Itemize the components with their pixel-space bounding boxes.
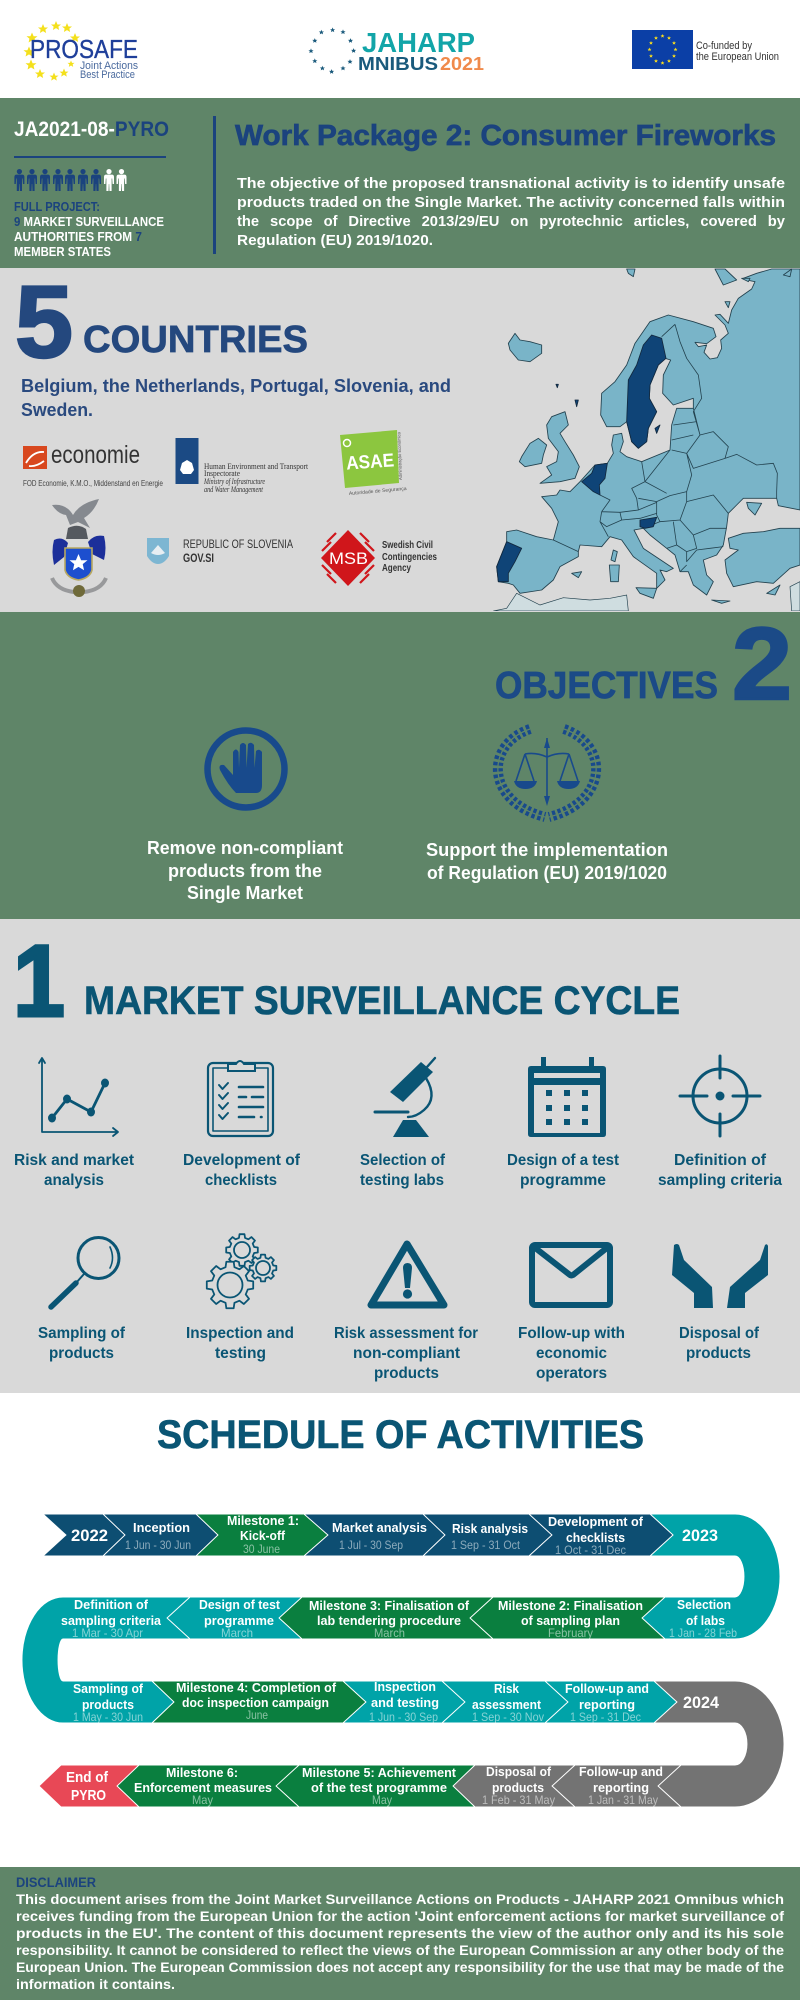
label: risk assessment for non-compliant products: products — [374, 1365, 439, 1382]
step: inspection and testing: 1 Jun - 30 Sep — [369, 1710, 438, 1724]
logo: Human Environment and Transport Inspectorate: and Water Management — [204, 485, 264, 494]
icon: open hands — [672, 1244, 768, 1308]
label: disposal of products — [679, 1325, 760, 1362]
step: selection of labs: of labs — [686, 1613, 725, 1628]
icon: nine people — [14, 169, 126, 191]
logo: PROSAFE: PROSAFE — [30, 34, 138, 64]
step: inception — [125, 1520, 191, 1552]
step: selection of labs: Selection — [677, 1597, 731, 1612]
step: sampling of products — [73, 1681, 144, 1724]
objective text: remove non-compliant: Single Market — [187, 883, 303, 903]
icon: calendar — [528, 1057, 606, 1137]
label: selection of testing labs: Selection of — [360, 1152, 446, 1169]
step: milestone 1: Kick-off — [240, 1528, 286, 1543]
step: sampling of products: 1 May - 30 Jun — [73, 1710, 143, 1724]
disclaimer body: receives funding from the European Union for the action 'Joint enforcement actions for market surveillance of — [16, 1909, 785, 1924]
objective paragraph: The objective of the proposed transnational activity is to identify unsafe — [237, 175, 785, 192]
step: design of test programme: Design of test — [199, 1597, 281, 1612]
step: risk assessment — [472, 1681, 544, 1724]
step: follow-up and reporting 2023: 1 Sep - 31 Dec — [570, 1710, 641, 1724]
step: milestone 4 — [176, 1680, 337, 1722]
icon: checklist clipboard — [208, 1061, 273, 1136]
objective paragraph: the scope of Directive 2013/29/EU on pyrotechnic articles, covered by — [237, 213, 786, 230]
panel: market surveillance cycle — [0, 919, 800, 1393]
step: definition of sampling criteria: 1 Mar - 30 Apr — [72, 1626, 143, 1640]
label: follow-up with economic operators — [518, 1325, 625, 1382]
countries list: Sweden. — [21, 400, 93, 420]
disclaimer body: This document arises from the Joint Market Surveillance Actions on Products - JAHARP 2021 Omnibus which — [16, 1892, 784, 1907]
step: market analysis: 1 Jul - 30 Sep — [339, 1538, 403, 1552]
label: definition of sampling criteria: Definition of — [674, 1152, 767, 1169]
label: risk assessment for non-compliant products: Risk assessment for — [334, 1325, 478, 1342]
step: milestone 4: Milestone 4: Completion of — [176, 1680, 337, 1695]
icon: warning triangle — [371, 1244, 444, 1305]
logo: EU co-funded: Co-funded by — [696, 40, 752, 52]
step: definition of sampling criteria: Definition of — [74, 1597, 149, 1612]
objective text: remove non-compliant — [147, 838, 343, 903]
step: development of checklists: checklists — [566, 1530, 625, 1545]
step: milestone 3: lab tendering procedure — [317, 1613, 461, 1628]
big number 2: 2 — [732, 607, 792, 721]
label: risk and market analysis: analysis — [44, 1172, 104, 1189]
step: definition of sampling criteria: sampling criteria — [61, 1613, 162, 1628]
project stats: 9 MARKET SURVEILLANCE — [14, 214, 164, 229]
step: milestone 4: June — [246, 1708, 268, 1722]
logo: JAHARP Omnibus 2021 — [308, 27, 484, 74]
logo: JAHARP Omnibus 2021: 2021 — [440, 54, 484, 74]
logo: Human Environment and Transport Inspectorate — [176, 438, 309, 494]
disclaimer body: products in the EU'. The content of this document represents the view of the author only and its his sole — [16, 1926, 785, 1941]
step: milestone 6 — [134, 1765, 272, 1807]
logo: Human Environment and Transport Inspectorate: Ministry of Infrastructure — [203, 477, 265, 486]
step: risk assessment: 1 Sep - 30 Nov — [472, 1710, 544, 1724]
logo: ASAE: Autoridade de Segurança — [349, 486, 407, 497]
step: milestone 6: May — [192, 1793, 213, 1807]
disclaimer body: European Union. The European Commission does not accept any responsibility for the use that may be made of the — [16, 1960, 784, 1975]
label: disposal of products: products — [686, 1345, 751, 1362]
step: milestone 4: doc inspection campaign — [182, 1695, 329, 1710]
heading: countries: COUNTRIES — [83, 319, 308, 361]
step: milestone 6: Milestone 6: — [166, 1765, 238, 1780]
objective text: support implementation — [426, 840, 668, 883]
step: sampling of products: Sampling of — [73, 1681, 144, 1696]
step: disposal of products — [482, 1764, 555, 1807]
step: selection of labs: 1 Jan - 28 Feb — [669, 1626, 737, 1640]
disclaimer body: information it contains. — [16, 1977, 175, 1992]
step: risk analysis: Risk analysis — [452, 1521, 528, 1536]
label: inspection and testing: Inspection and — [186, 1325, 294, 1342]
step: milestone 5: Milestone 5: Achievement — [302, 1765, 457, 1780]
step: follow-up and reporting 2023: reporting — [579, 1697, 635, 1712]
year 2022: 2022 — [71, 1526, 108, 1545]
step: selection of labs — [669, 1597, 737, 1640]
icon: microscope — [375, 1058, 435, 1137]
step: milestone 1: Milestone 1: — [227, 1513, 299, 1528]
icon: magnifying glass — [51, 1238, 119, 1307]
logo: Republic of Slovenia: GOV.SI — [183, 551, 214, 565]
step: follow-up and reporting 2023 — [565, 1681, 649, 1724]
logo: MSB: Contingencies — [382, 551, 437, 563]
step: follow-up and reporting 2024 — [579, 1764, 663, 1807]
step: milestone 6: Enforcement measures — [134, 1780, 272, 1795]
step: market analysis: Market analysis — [332, 1520, 427, 1535]
step: design of test programme: March — [221, 1626, 253, 1640]
objective text: remove non-compliant: Remove non-compliant — [147, 838, 343, 858]
project code: JA2021-08-PYRO — [14, 118, 169, 141]
year 2023: 2023 — [682, 1526, 718, 1545]
logo: economie — [23, 441, 163, 488]
heading: schedule of activities: SCHEDULE OF ACTIVITIES — [157, 1413, 644, 1457]
label: selection of testing labs — [360, 1152, 446, 1189]
header logos band — [24, 21, 779, 81]
logo: Republic of Slovenia — [147, 537, 293, 565]
step: follow-up and reporting 2024: reporting — [593, 1780, 649, 1795]
label: development of checklists: checklists — [205, 1172, 277, 1189]
logo: Republic of Slovenia: REPUBLIC OF SLOVENIA — [183, 537, 293, 551]
icon: stop hand — [208, 730, 284, 808]
heading: objectives: OBJECTIVES — [495, 665, 718, 707]
logo: MSB: Agency — [382, 562, 411, 574]
label: inspection and testing: testing — [215, 1345, 266, 1362]
logo: JAHARP Omnibus 2021: JAHARP — [362, 27, 475, 58]
icon: target — [680, 1056, 760, 1136]
project stats — [14, 199, 164, 259]
objective paragraph: products traded on the Single Market. The activity concerned falls within — [237, 194, 785, 211]
panel: disclaimer — [0, 1867, 800, 2000]
label: definition of sampling criteria: sampling criteria — [658, 1172, 782, 1189]
disclaimer body: responsibility. It cannot be considered to reflect the views of the European Commission ar any other body of the — [16, 1943, 785, 1958]
step: end of PYRO: End of — [66, 1769, 109, 1786]
big number 1: 1 — [13, 924, 65, 1038]
step: milestone 3: March — [374, 1626, 405, 1640]
step: milestone 2: February — [548, 1626, 593, 1640]
label: risk and market analysis — [14, 1152, 135, 1189]
step: risk assessment: Risk — [494, 1681, 520, 1696]
label: design of a test programme: Design of a test — [507, 1152, 620, 1169]
objective text: remove non-compliant: products from the — [168, 861, 322, 881]
logo: MSB: Swedish Civil — [382, 539, 433, 551]
step: design of test programme: programme — [204, 1613, 274, 1628]
label: risk assessment for non-compliant products: non-compliant — [353, 1345, 461, 1362]
step: risk analysis: 1 Sep - 31 Oct — [451, 1538, 521, 1552]
step: follow-up and reporting 2023: Follow-up and — [565, 1681, 649, 1696]
project stats: AUTHORITIES FROM 7 — [14, 229, 142, 244]
step: development of checklists — [548, 1514, 644, 1557]
big number 5: 5 — [15, 265, 73, 379]
objective paragraph: Regulation (EU) 2019/1020. — [237, 232, 433, 249]
step: end of PYRO: PYRO — [71, 1787, 106, 1804]
step: milestone 5: May — [372, 1793, 392, 1807]
step: milestone 3: Milestone 3: Finalisation of — [309, 1598, 470, 1613]
step: disposal of products: Disposal of — [486, 1764, 552, 1779]
project stats: MEMBER STATES — [14, 244, 111, 259]
logo: economie: FOD Economie, K.M.O., Middenstand en Energie — [23, 479, 163, 488]
logo: Human Environment and Transport Inspectorate: Human Environment and Transport — [204, 462, 309, 471]
logo: PROSAFE — [24, 21, 138, 81]
logo: ASAE: Administração Económica — [396, 432, 403, 480]
step: risk assessment: assessment — [472, 1697, 542, 1712]
step: milestone 3 — [309, 1598, 470, 1640]
map: Europe — [493, 269, 800, 611]
step: milestone 2: Milestone 2: Finalisation — [498, 1598, 643, 1613]
logo: JAHARP Omnibus 2021: MNIBUS — [358, 54, 438, 74]
step: inspection and testing: Inspection — [374, 1679, 436, 1694]
step: inspection and testing: and testing — [371, 1695, 439, 1710]
step: inception: 1 Jun - 30 Jun — [125, 1538, 191, 1552]
panel: 5 countries — [0, 265, 800, 612]
label: risk and market analysis: Risk and market — [14, 1152, 135, 1169]
objective text: support implementation: of Regulation (EU) 2019/1020 — [427, 863, 667, 883]
logo: ASAE: ASAE — [346, 450, 395, 475]
objective text: support implementation: Support the implementation — [426, 840, 668, 860]
step: disposal of products: 1 Feb - 31 May — [482, 1793, 555, 1807]
objective paragraph — [237, 175, 786, 249]
step: inception: Inception — [133, 1520, 190, 1535]
label: follow-up with economic operators: Follow-up with — [518, 1325, 625, 1342]
label: follow-up with economic operators: operators — [536, 1365, 607, 1382]
logo: EU co-funded: the European Union — [696, 51, 779, 63]
icon: envelope — [532, 1245, 610, 1305]
label: design of a test programme — [507, 1152, 620, 1189]
logo: coat of arms — [52, 499, 106, 597]
timeline: serpentine schedule — [22, 1513, 784, 1807]
logo: Human Environment and Transport Inspectorate: Inspectorate — [204, 469, 240, 478]
icon: scales of justice in laurel — [498, 729, 596, 817]
logo: ASAE — [340, 430, 407, 497]
icon: gears — [207, 1234, 276, 1308]
step: disposal of products: products — [492, 1780, 544, 1795]
panel: project summary — [0, 98, 800, 268]
logo: economie: economie — [51, 441, 140, 469]
heading: market surveillance cycle: MARKET SURVEILLANCE CYCLE — [84, 979, 680, 1023]
label: sampling of products: products — [49, 1345, 114, 1362]
step: follow-up and reporting 2024: 1 Jan - 31 May — [588, 1793, 658, 1807]
step: development of checklists: Development of — [548, 1514, 644, 1529]
step: definition of sampling criteria — [61, 1597, 162, 1640]
step: milestone 1 — [227, 1513, 299, 1556]
label: risk assessment for non-compliant products — [334, 1325, 478, 1382]
step: milestone 2 — [498, 1598, 643, 1640]
project stats: FULL PROJECT: — [14, 199, 100, 214]
step: inspection and testing — [369, 1679, 439, 1724]
logo: MSB — [321, 530, 437, 586]
step: milestone 1: 30 June — [243, 1542, 280, 1556]
logo: EU co-funded — [632, 30, 779, 69]
logo: MSB: MSB — [329, 549, 368, 568]
label: sampling of products — [38, 1325, 126, 1362]
step: market analysis — [332, 1520, 427, 1552]
label: sampling of products: Sampling of — [38, 1325, 126, 1342]
label: design of a test programme: programme — [520, 1172, 606, 1189]
label: development of checklists: Development of — [183, 1152, 301, 1169]
countries list — [21, 376, 451, 420]
step: milestone 5: of the test programme — [311, 1780, 447, 1795]
logo: PROSAFE: Joint Actions — [80, 60, 138, 72]
label: selection of testing labs: testing labs — [360, 1172, 444, 1189]
disclaimer heading: DISCLAIMER — [16, 1875, 96, 1890]
step: development of checklists: 1 Oct - 31 Dec — [555, 1543, 626, 1557]
step: end of PYRO — [66, 1769, 109, 1804]
step: milestone 2: of sampling plan — [521, 1613, 620, 1628]
label: follow-up with economic operators: economic — [536, 1345, 607, 1362]
label: inspection and testing — [186, 1325, 294, 1362]
label: definition of sampling criteria — [658, 1152, 782, 1189]
disclaimer body — [16, 1892, 785, 1992]
label: development of checklists — [183, 1152, 301, 1189]
label: disposal of products: Disposal of — [679, 1325, 760, 1342]
panel: objectives — [0, 607, 800, 919]
year 2024: 2024 — [683, 1693, 720, 1712]
step: milestone 5 — [302, 1765, 457, 1807]
heading: work package: Work Package 2: Consumer Fireworks — [235, 120, 776, 152]
countries list: Belgium, the Netherlands, Portugal, Slovenia, and — [21, 376, 451, 396]
step: sampling of products: products — [82, 1697, 134, 1712]
logo: PROSAFE: Best Practice — [80, 69, 135, 81]
icon: line chart — [39, 1058, 118, 1136]
step: design of test programme — [199, 1597, 281, 1640]
step: follow-up and reporting 2024: Follow-up and — [579, 1764, 663, 1779]
step: risk analysis — [451, 1521, 528, 1552]
